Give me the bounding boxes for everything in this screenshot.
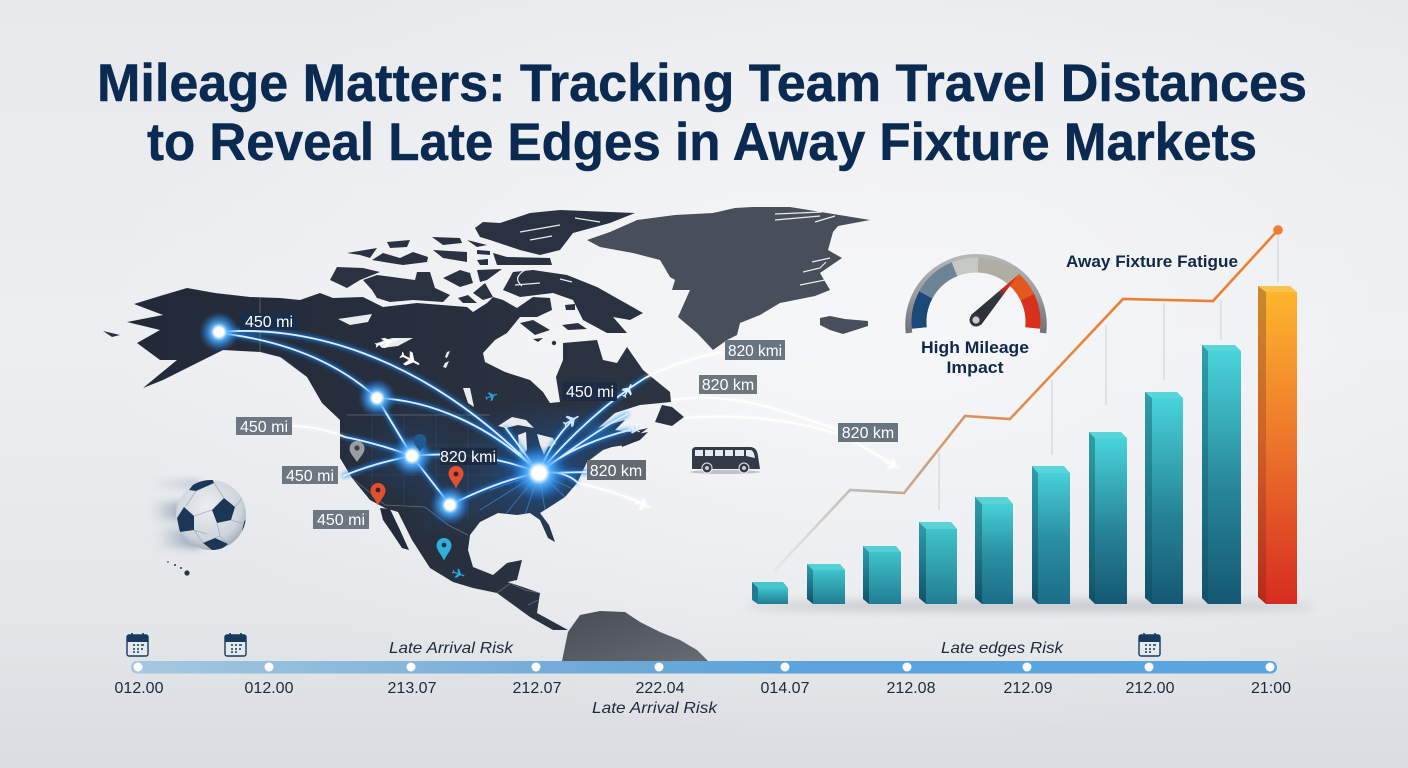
bar shadow	[745, 601, 1315, 611]
bar 6	[1032, 466, 1070, 604]
route hubs	[199, 312, 567, 525]
map: Greenland and Iceland	[587, 207, 870, 350]
timeline annotations	[389, 640, 1064, 717]
map: Arctic islands	[103, 210, 684, 447]
label: 820 km far Atlantic: 820 km	[842, 425, 894, 442]
bar 9	[1202, 345, 1241, 604]
icon: bus	[690, 447, 760, 474]
icon: calendar 2	[225, 633, 246, 656]
gauge label: High Mileage	[921, 338, 1029, 357]
icon: calendar 1	[127, 633, 148, 656]
bar 8	[1145, 392, 1183, 604]
bar 7	[1089, 432, 1127, 604]
map: Baja California	[380, 508, 409, 550]
timeline annotations: Late Arrival Risk	[389, 640, 514, 657]
timeline dates: 014.07	[761, 680, 810, 697]
trend line	[775, 225, 1283, 570]
bar 3	[863, 546, 901, 604]
title: Mileage Matters: Tracking Team Travel Distances	[97, 54, 1307, 113]
title: to Reveal Late Edges in Away Fixture Markets	[147, 113, 1257, 172]
timeline dates: 212.08	[887, 680, 936, 697]
label: 820 kmi Greenland: 820 kmi	[728, 343, 782, 360]
routes fading over the ocean	[293, 352, 895, 505]
chart label: Away Fixture Fatigue	[1066, 252, 1238, 271]
label: 450 mi Alaska: 450 mi	[245, 314, 293, 331]
timeline bar	[131, 661, 1277, 674]
icon: soccer ball	[150, 478, 248, 553]
timeline dates: 012.00	[245, 680, 294, 697]
gauge label	[921, 338, 1029, 377]
map: South America	[562, 611, 708, 661]
timeline dates: 212.09	[1004, 680, 1053, 697]
timeline annotations: Late Arrival Risk	[592, 700, 718, 717]
label: 820 km Atlantic: 820 km	[702, 377, 754, 394]
timeline dates: 222.04	[636, 680, 685, 697]
routes	[219, 331, 645, 505]
timeline dates: 213.07	[388, 680, 437, 697]
timeline dates	[115, 680, 1291, 697]
timeline dates: 21:00	[1251, 680, 1291, 697]
label: 450 mi west 1: 450 mi	[240, 419, 288, 436]
gauge label: Impact	[946, 358, 1004, 377]
chart guide lines	[939, 235, 1278, 510]
label: 450 mi west 3: 450 mi	[317, 512, 365, 529]
gauge needle	[970, 275, 1018, 326]
bar chart	[752, 286, 1297, 604]
map: blue US glow	[260, 298, 655, 605]
airplanes	[374, 334, 902, 580]
icon: calendar 3	[1139, 633, 1160, 656]
label: 450 mi west 2: 450 mi	[286, 468, 334, 485]
label: 820 kmi central: 820 kmi	[440, 449, 496, 466]
timeline dates: 212.07	[513, 680, 562, 697]
bar 4	[919, 522, 957, 604]
timeline annotations: Late edges Risk	[941, 640, 1064, 657]
title	[97, 54, 1307, 172]
bar 5	[975, 497, 1013, 604]
label: 450 mi Quebec: 450 mi	[566, 384, 614, 401]
timeline dates: 012.00	[115, 680, 164, 697]
bar 2	[807, 564, 845, 604]
timeline dates: 212.00	[1126, 680, 1175, 697]
bar 10 orange	[1258, 286, 1297, 604]
gauge	[908, 257, 1043, 333]
small Hawaiian islands	[167, 561, 190, 576]
map of North America	[103, 207, 870, 661]
location pins	[350, 434, 464, 560]
map: mainland	[127, 288, 671, 630]
map: white lakes and inlets	[338, 314, 556, 458]
label: 820 km coast: 820 km	[590, 463, 642, 480]
bar 1	[752, 582, 788, 604]
distance labels	[236, 313, 898, 529]
